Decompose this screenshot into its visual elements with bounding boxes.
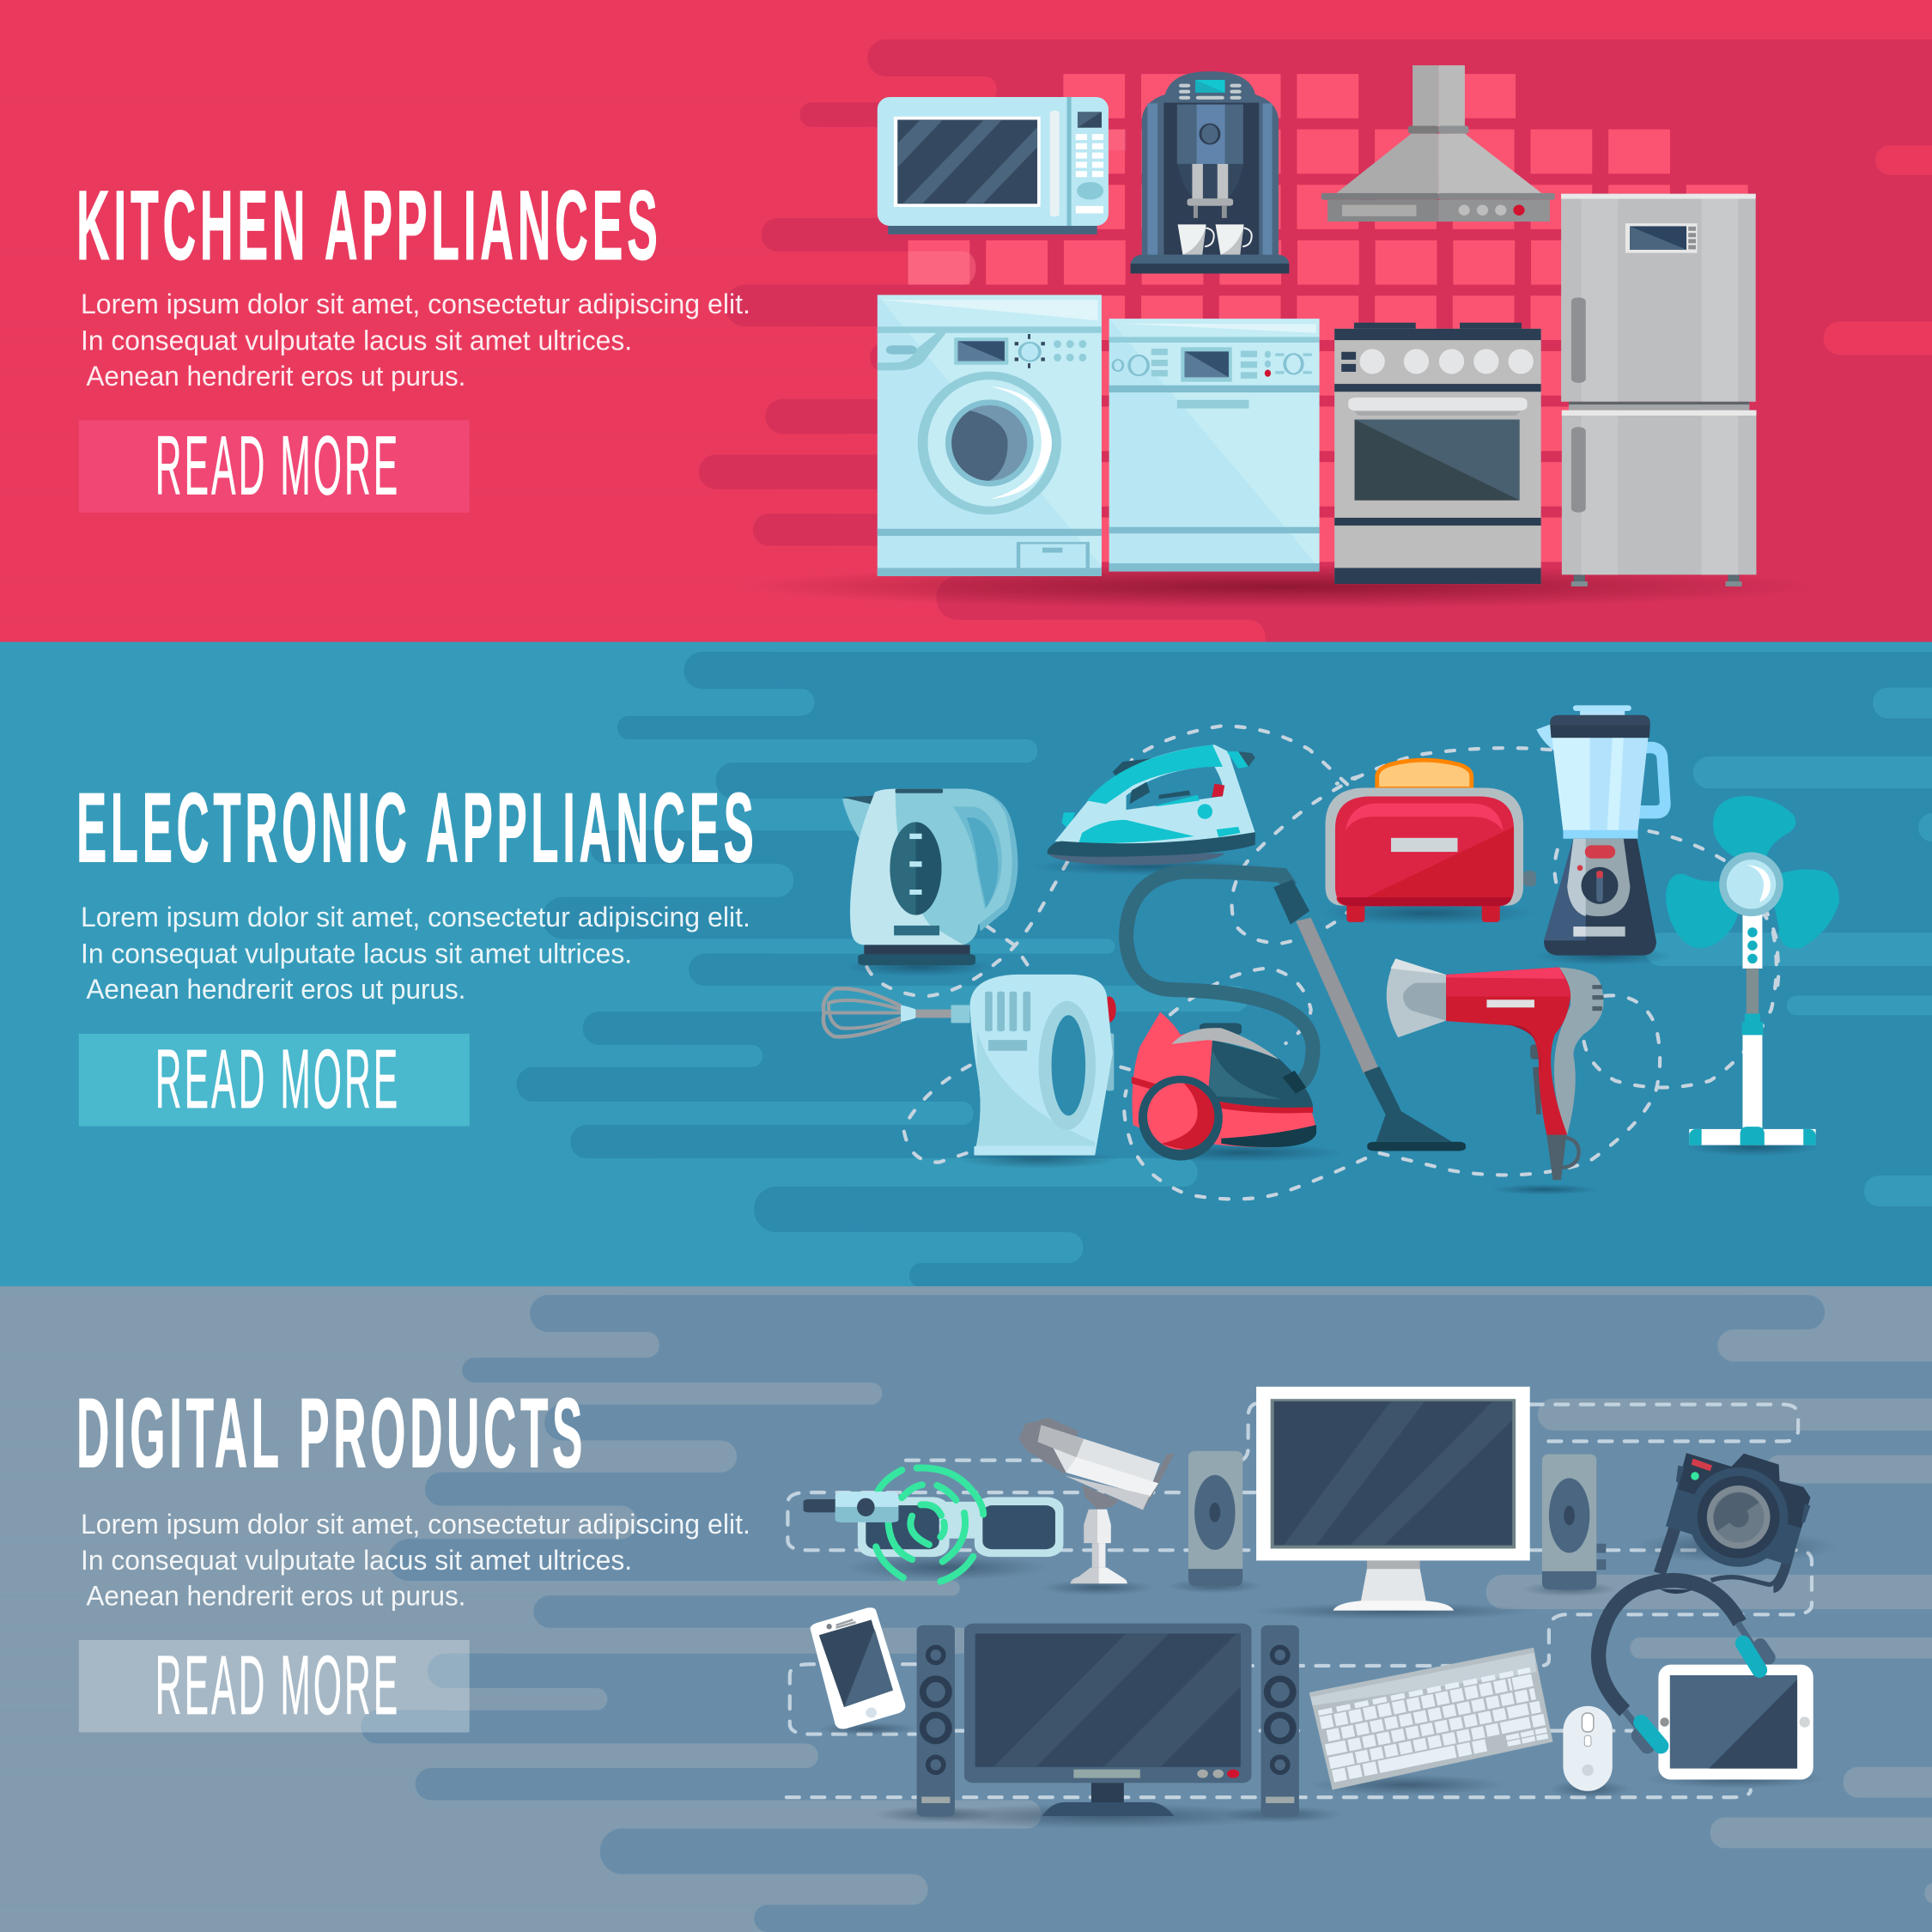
digital products artwork: [804, 1387, 1617, 1829]
desktop monitor: [1252, 1387, 1537, 1619]
standing fan: [1666, 796, 1839, 1157]
panel: electronic appliances: [0, 642, 1932, 1288]
body text: digital: [81, 1509, 750, 1612]
dashed connector line: digital: [787, 1404, 1812, 1797]
button: read more (digital): READ MORE: [155, 1638, 400, 1732]
button: read more (electronic): READ MORE: [155, 1032, 400, 1126]
button: read more (digital): [79, 1638, 470, 1733]
refrigerator: [1561, 194, 1756, 586]
range hood: [1321, 65, 1555, 222]
hand mixer: [823, 975, 1120, 1169]
body text: electronic: [81, 902, 750, 1005]
body text: kitchen: [81, 289, 750, 392]
electronic appliances artwork, right group: [1321, 705, 1839, 1194]
vacuum cleaner: [1127, 872, 1466, 1162]
headset: [1599, 1581, 1769, 1746]
body text: kitchen: Aenean hendrerit eros ut purus.: [86, 361, 465, 392]
fingerprint scan arcs: [876, 1467, 983, 1582]
electronic background bars: [0, 642, 1932, 1288]
body text: electronic: In consequat vulputate lacus sit amet ultrices.: [81, 938, 632, 969]
panel: electronic appliances: ELECTRONIC APPLIANCES: [76, 774, 757, 884]
body text: digital: Lorem ipsum dolor sit amet, consectetur adipiscing elit.: [81, 1509, 750, 1540]
photo camera: [1633, 1453, 1838, 1588]
digital background bars: [0, 1286, 1932, 1932]
dishwasher: [1109, 319, 1320, 572]
toaster: [1321, 760, 1536, 926]
button: read more (kitchen): READ MORE: [155, 418, 400, 512]
body text: electronic: Aenean hendrerit eros ut purus.: [86, 974, 465, 1005]
security camera: [1018, 1418, 1175, 1595]
speaker right: [1522, 1454, 1617, 1596]
dashed connector line: electronics: [866, 726, 1777, 1199]
kettle: [842, 789, 1018, 976]
tablet: [1645, 1665, 1826, 1789]
mouse: [1549, 1706, 1631, 1798]
body text: kitchen: Lorem ipsum dolor sit amet, consectetur adipiscing elit.: [81, 289, 750, 319]
digital products artwork, right group: [1309, 1453, 1838, 1798]
webcam handle: [804, 1492, 898, 1522]
smartphone: [810, 1607, 919, 1735]
microwave: [878, 97, 1109, 234]
floor shadow: [739, 564, 1824, 609]
button: read more (electronic): [79, 1032, 470, 1127]
headset ear pads: [1641, 1643, 1759, 1746]
flat tv with tower speakers: [875, 1624, 1343, 1829]
body text: electronic: Lorem ipsum dolor sit amet, consectetur adipiscing elit.: [81, 902, 750, 933]
iron: [1031, 744, 1262, 875]
body text: digital: In consequat vulputate lacus sit amet ultrices.: [81, 1545, 632, 1576]
coffee machine: [1131, 71, 1289, 274]
kitchen background bars: [0, 0, 1932, 657]
body text: kitchen: In consequat vulputate lacus sit amet ultrices.: [81, 325, 632, 356]
blender: [1534, 705, 1674, 965]
hair dryer: [1387, 958, 1603, 1194]
panel: digital products: DIGITAL PRODUCTS: [76, 1378, 586, 1488]
3d goggles: [844, 1498, 1063, 1581]
panel: digital products: [0, 1286, 1932, 1932]
wall tiles: [908, 96, 1748, 540]
panel: kitchen appliances: [0, 0, 1932, 657]
speaker left: [1167, 1451, 1262, 1594]
washing machine: [878, 295, 1102, 576]
wireless keyboard: [1309, 1648, 1552, 1795]
oven: [1334, 323, 1541, 584]
button: read more (kitchen): [79, 418, 470, 513]
kitchen appliances artwork: [878, 65, 1756, 586]
electronic appliances artwork: [823, 744, 1466, 1169]
body text: digital: Aenean hendrerit eros ut purus.: [86, 1581, 465, 1612]
panel: kitchen appliances: KITCHEN APPLIANCES: [76, 171, 662, 281]
